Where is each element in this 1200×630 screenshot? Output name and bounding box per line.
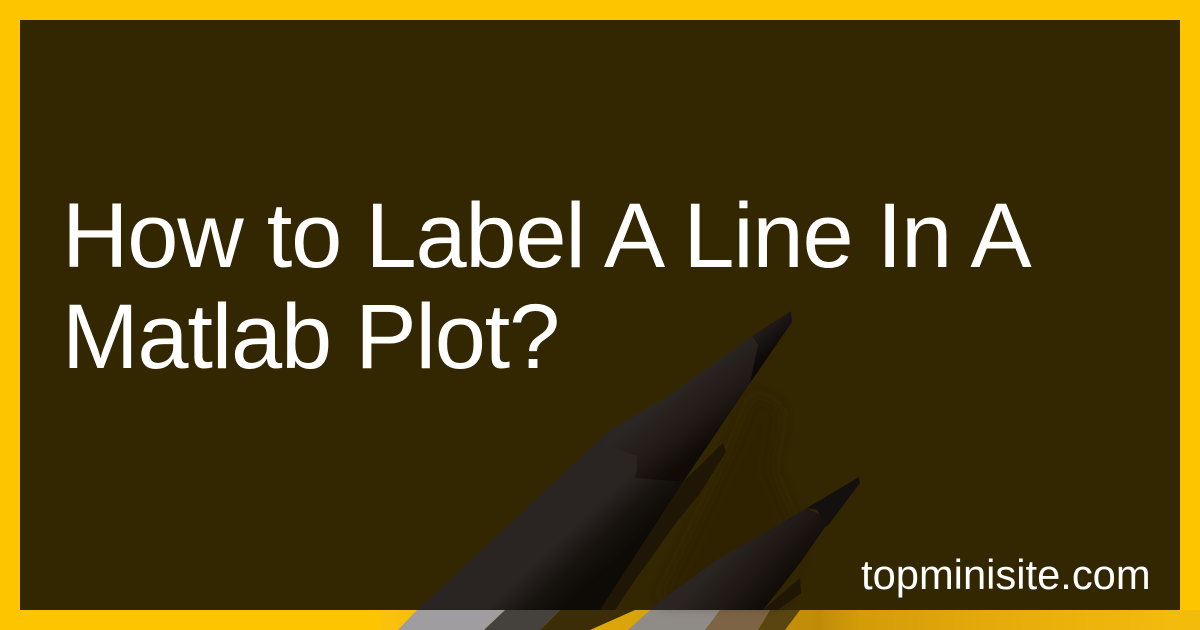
large pencil body (417, 430, 683, 610)
large pencil dark base in bottom strip (484, 610, 560, 630)
title: How to Label A Line In A (62, 185, 1031, 287)
large pencil (417, 311, 792, 610)
small pencil shadow (763, 578, 801, 610)
large pencil wood (605, 336, 765, 482)
large pencil base in bottom strip (398, 610, 505, 630)
small pencil shadow in bottom strip (758, 610, 800, 630)
large pencil shadow (600, 443, 726, 610)
site url: topminisite.com (861, 551, 1151, 598)
small pencil lead (807, 477, 860, 527)
small pencil wood in bottom strip (705, 610, 770, 630)
small pencil (648, 477, 860, 610)
small pencil base in bottom strip (628, 610, 720, 630)
bottom strip shading (380, 610, 1200, 630)
small pencil body (648, 508, 830, 610)
large pencil shadow in bottom strip (540, 610, 635, 630)
title: Matlab Plot? (62, 286, 559, 388)
large pencil lead (750, 311, 792, 383)
title (62, 185, 1032, 388)
soft shadow glow (660, 395, 800, 600)
